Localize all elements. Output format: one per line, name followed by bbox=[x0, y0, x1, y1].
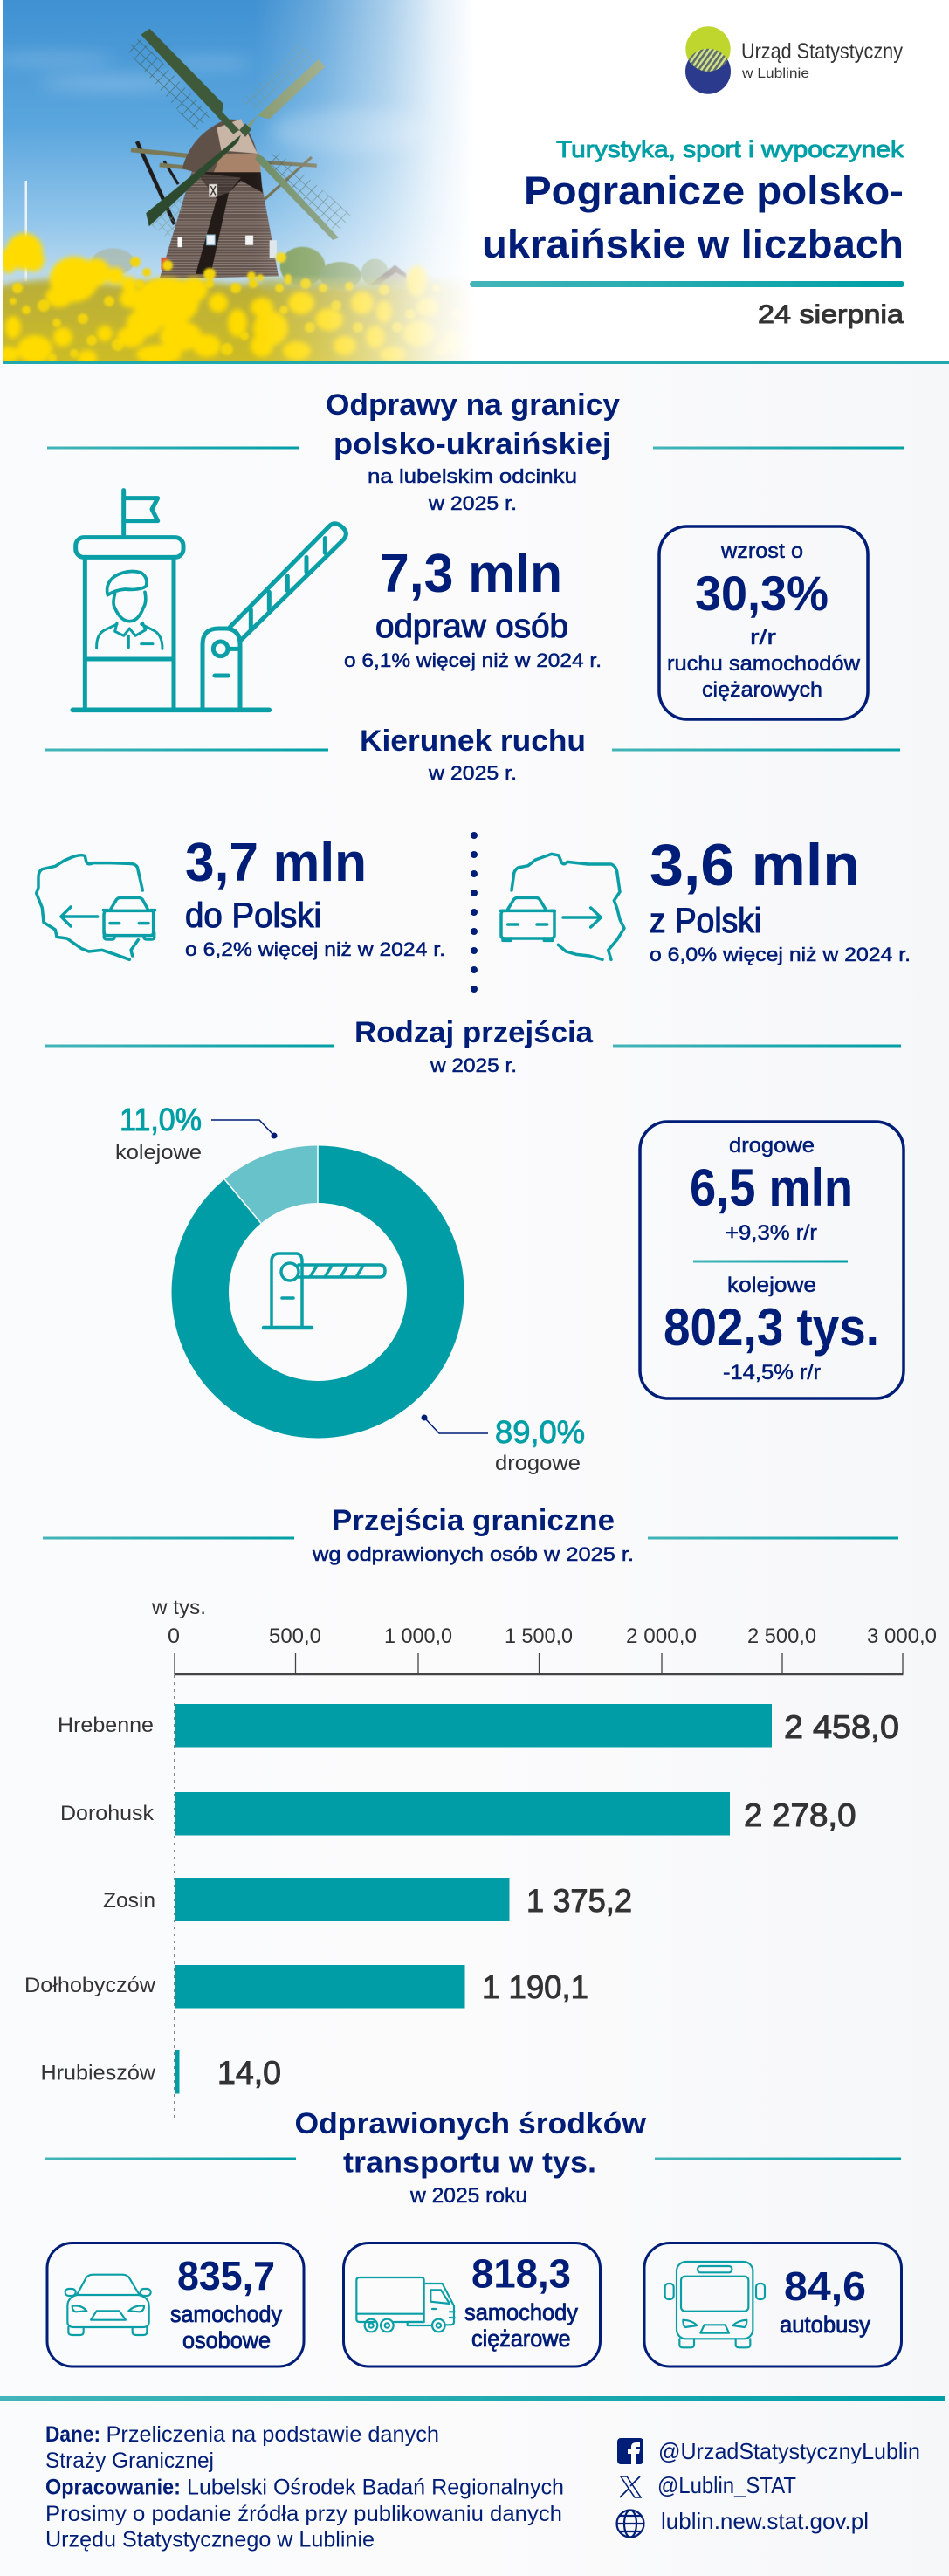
icon: map with car leaving Poland bbox=[500, 854, 624, 959]
panel: border crossings bbox=[24, 1504, 937, 2121]
axis: 3 000,0 bbox=[867, 1625, 937, 1648]
date: 24 sierpnia bbox=[758, 300, 904, 329]
card: passenger cars: samochody bbox=[170, 2301, 282, 2327]
logo: w Lublinie bbox=[741, 66, 809, 81]
axis: 1 500,0 bbox=[505, 1625, 573, 1648]
source text bbox=[45, 2422, 564, 2552]
stat: to Poland: 3,7 mln bbox=[185, 833, 367, 893]
stat: to Poland: do Polski bbox=[185, 896, 321, 935]
stat: to Poland: o 6,2% więcej niż w 2024 r. bbox=[185, 938, 445, 960]
icon: bus bbox=[665, 2262, 765, 2347]
heading: direction: Kierunek ruchu bbox=[360, 725, 586, 758]
callout: 30,3%: 30,3% bbox=[695, 566, 829, 621]
source text: Lubelski Ośrodek Badań Regionalnych bbox=[187, 2476, 564, 2500]
stat: 7,3 mln bbox=[344, 544, 602, 671]
rapeseed field bbox=[3, 274, 464, 361]
card: trucks: 818,3 bbox=[471, 2250, 571, 2296]
bar: Zosin: Zosin bbox=[103, 1889, 155, 1913]
panel: traffic direction bbox=[37, 725, 911, 993]
heading: border crossings bbox=[312, 1504, 634, 1565]
heading: clearances: w 2025 r. bbox=[428, 492, 517, 514]
tower and cap bbox=[160, 168, 279, 278]
social: facebook handle: @UrzadStatystycznyLublin bbox=[658, 2438, 920, 2464]
flagpole bbox=[24, 181, 27, 281]
card: buses: autobusy bbox=[780, 2312, 870, 2338]
bar: Dołhobyczów: Dołhobyczów bbox=[24, 1974, 156, 1997]
bar: Hrubieszów bbox=[40, 2050, 281, 2093]
stat: from Poland: z Polski bbox=[650, 902, 761, 940]
icon: facebook bbox=[617, 2438, 643, 2464]
heading: crossing type: Rodzaj przejścia bbox=[354, 1016, 594, 1049]
callout: road and rail totals: -14,5% r/r bbox=[723, 1361, 821, 1384]
trees and house bbox=[92, 247, 407, 289]
heading: crossing type: w 2025 r. bbox=[430, 1054, 517, 1076]
axis bbox=[151, 1596, 937, 2121]
icon: truck bbox=[356, 2277, 455, 2332]
heading: vehicles: w 2025 roku bbox=[409, 2184, 527, 2208]
struts bbox=[137, 141, 175, 224]
logo bbox=[685, 26, 903, 94]
segment: road 89,0% bbox=[172, 1145, 464, 1439]
card: trucks: samochody bbox=[464, 2299, 578, 2325]
source text: Przeliczenia na podstawie danych bbox=[107, 2422, 439, 2447]
callout: road and rail totals: 802,3 tys. bbox=[664, 1298, 879, 1357]
bar: Hrubieszów: Hrubieszów bbox=[40, 2062, 156, 2085]
heading: border crossings: wg odprawionych osób w 2025 r. bbox=[312, 1543, 634, 1565]
callout: road and rail totals: +9,3% r/r bbox=[726, 1221, 817, 1245]
bar: Dorohusk: 2 278,0 bbox=[744, 1797, 856, 1833]
label: road share: 89,0% bbox=[495, 1414, 585, 1450]
dotted divider bbox=[471, 832, 478, 993]
panel: vehicles bbox=[45, 2107, 901, 2366]
bar: Dołhobyczów: 1 190,1 bbox=[482, 1969, 588, 2005]
card: buses: 84,6 bbox=[784, 2263, 866, 2309]
stat: 7,3 mln: 7,3 mln bbox=[380, 544, 562, 604]
source text: Dane: bbox=[45, 2422, 100, 2447]
title bbox=[482, 168, 904, 266]
bar: Zosin bbox=[103, 1878, 632, 1921]
bar: Dorohusk: Dorohusk bbox=[60, 1802, 155, 1825]
callout: road and rail totals: kolejowe bbox=[727, 1274, 816, 1297]
panel: crossing type bbox=[45, 1016, 904, 1475]
segment: rail 11,0% bbox=[224, 1145, 318, 1223]
source text: Prosimy o podanie źródła przy publikowaniu danych bbox=[45, 2502, 562, 2526]
social: X handle: @Lublin_STAT bbox=[657, 2472, 796, 2498]
icon: border booth with guard and barrier bbox=[72, 491, 346, 710]
label: road share bbox=[421, 1414, 585, 1475]
stat: to Poland bbox=[185, 833, 445, 960]
card: passenger cars bbox=[47, 2243, 304, 2366]
card: trucks: ciężarowe bbox=[471, 2325, 571, 2352]
axis: 2 000,0 bbox=[626, 1625, 697, 1648]
axis: 1 000,0 bbox=[384, 1625, 452, 1648]
card: trucks bbox=[344, 2243, 601, 2366]
axis: w tys. bbox=[151, 1596, 206, 1618]
stat: from Poland: o 6,0% więcej niż w 2024 r. bbox=[650, 944, 911, 965]
sail planks bbox=[141, 29, 239, 134]
logo: Urząd Statystyczny bbox=[741, 39, 903, 64]
heading: clearances: Odprawy na granicy bbox=[326, 388, 620, 422]
callout: 30,3%: r/r bbox=[750, 626, 776, 649]
bar: Hrebenne: Hrebenne bbox=[58, 1714, 154, 1737]
bar: Hrubieszów: 14,0 bbox=[217, 2055, 281, 2091]
social: website: lublin.new.stat.gov.pl bbox=[661, 2508, 869, 2534]
label: road share: drogowe bbox=[495, 1452, 581, 1475]
title: ukraińskie w liczbach bbox=[482, 222, 904, 266]
card: passenger cars: osobowe bbox=[182, 2327, 271, 2353]
panel: header bbox=[0, 0, 904, 375]
heading: vehicles: transportu w tys. bbox=[343, 2146, 596, 2179]
stat: 7,3 mln: o 6,1% więcej niż w 2024 r. bbox=[344, 649, 602, 671]
heading: crossing type bbox=[354, 1016, 594, 1076]
callout: 30,3%: ruchu samochodów bbox=[667, 652, 861, 676]
source text: Urzędu Statystycznego w Lublinie bbox=[45, 2528, 375, 2552]
heading: clearances: na lubelskim odcinku bbox=[368, 465, 577, 487]
source text: Straży Granicznej bbox=[45, 2449, 214, 2473]
panel: border clearances bbox=[47, 388, 904, 719]
label: rail share bbox=[115, 1102, 278, 1164]
stat: 7,3 mln: odpraw osób bbox=[375, 608, 568, 645]
axis: 500,0 bbox=[269, 1625, 321, 1648]
sails lattices bbox=[125, 38, 210, 132]
icon: X bbox=[620, 2476, 641, 2497]
icon: map with car heading to Poland bbox=[37, 855, 155, 959]
card: passenger cars: 835,7 bbox=[177, 2253, 275, 2298]
fade to white bbox=[253, 0, 475, 361]
heading: direction bbox=[360, 725, 586, 784]
stat: from Poland bbox=[650, 832, 911, 965]
heading: clearances bbox=[326, 388, 620, 514]
photo: windmill in rapeseed field bbox=[0, 0, 489, 375]
bar: Dołhobyczów bbox=[24, 1965, 588, 2008]
bar: Hrebenne bbox=[58, 1704, 899, 1748]
icon: barrier bbox=[264, 1254, 385, 1328]
axis: 0 bbox=[168, 1625, 180, 1648]
windows bbox=[177, 237, 182, 247]
bar: Zosin: 1 375,2 bbox=[526, 1883, 632, 1919]
card: buses bbox=[644, 2243, 901, 2366]
icon: car bbox=[65, 2275, 151, 2335]
icon: globe bbox=[616, 2511, 644, 2537]
heading: direction: w 2025 r. bbox=[428, 762, 517, 784]
heading: clearances: polsko-ukraińskiej bbox=[334, 428, 611, 461]
panel: footer bbox=[45, 2422, 920, 2552]
heading: vehicles: Odprawionych środków bbox=[295, 2107, 647, 2140]
source text: Opracowanie: bbox=[45, 2476, 181, 2500]
callout: 30,3%: ciężarowych bbox=[702, 678, 822, 702]
bar chart bbox=[24, 1596, 937, 2121]
title: Pogranicze polsko- bbox=[524, 168, 904, 213]
callout: 30,3% bbox=[659, 526, 868, 719]
heading: vehicles bbox=[295, 2107, 647, 2208]
bar: Hrebenne: 2 458,0 bbox=[784, 1709, 899, 1745]
stat: from Poland: 3,6 mln bbox=[650, 832, 860, 898]
axis: 2 500,0 bbox=[747, 1625, 816, 1648]
label: rail share: kolejowe bbox=[115, 1141, 202, 1164]
callout: road and rail totals bbox=[640, 1122, 904, 1398]
category label: Turystyka, sport i wypoczynek bbox=[556, 136, 904, 162]
callout: road and rail totals: 6,5 mln bbox=[690, 1158, 853, 1217]
callout: road and rail totals: drogowe bbox=[729, 1134, 815, 1157]
label: rail share: 11,0% bbox=[120, 1102, 202, 1137]
heading: border crossings: Przejścia graniczne bbox=[332, 1504, 615, 1537]
callout: 30,3%: wzrost o bbox=[720, 539, 803, 563]
donut chart bbox=[172, 1145, 464, 1439]
bar: Dorohusk bbox=[60, 1792, 856, 1835]
